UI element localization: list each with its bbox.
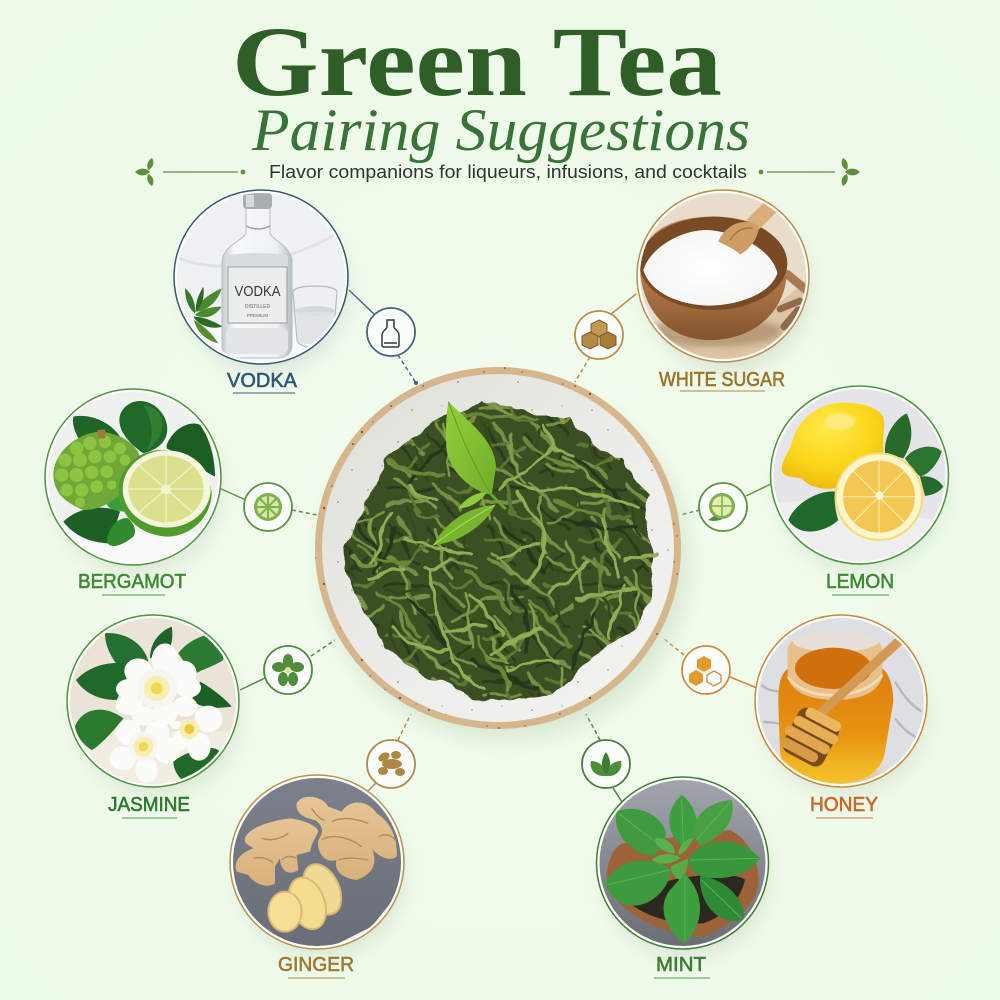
bowl rim bbox=[315, 367, 681, 729]
lemon photo bbox=[774, 389, 946, 561]
bergamot label: BERGAMOT bbox=[78, 571, 186, 593]
honey icon bbox=[682, 646, 730, 694]
sugar icon bbox=[575, 311, 623, 359]
bergamot fruit bbox=[53, 429, 139, 510]
small flower bbox=[170, 706, 222, 761]
lemon leaves bbox=[788, 413, 943, 532]
lemon label: LEMON bbox=[826, 571, 894, 593]
loose tea leaves bbox=[343, 400, 659, 702]
mint label: MINT bbox=[656, 954, 706, 976]
lemon icon bbox=[699, 483, 747, 531]
honey photo bbox=[758, 618, 924, 784]
pairing: vodka bbox=[170, 185, 418, 393]
jasmine label: JASMINE bbox=[108, 794, 190, 816]
lime slice bbox=[119, 450, 212, 537]
mint leaves bbox=[605, 795, 760, 943]
tagline: Flavor companions for liqueurs, infusions, and cocktails bbox=[269, 162, 747, 182]
fresh tea leaf sprig bbox=[433, 402, 505, 545]
pairing: jasmine bbox=[60, 605, 312, 818]
ginger photo bbox=[233, 778, 401, 946]
ginger ring bbox=[230, 775, 404, 949]
ornament left bbox=[135, 158, 245, 186]
bergamot photo bbox=[48, 392, 218, 546]
sugar ring bbox=[637, 190, 809, 362]
ginger icon bbox=[367, 740, 415, 788]
whole lemon bbox=[782, 403, 884, 489]
bottle: PREMIUM bbox=[247, 313, 268, 318]
mint icon bbox=[582, 740, 630, 788]
bowl interior bbox=[322, 374, 674, 722]
pairing: mint bbox=[582, 740, 780, 978]
mint photo bbox=[590, 770, 780, 960]
pairing: ginger bbox=[225, 740, 415, 978]
sugar photo bbox=[640, 193, 806, 359]
bottle: VODKA bbox=[234, 283, 280, 300]
honey ring bbox=[755, 615, 927, 787]
citrus leaves bbox=[63, 401, 215, 546]
jasmine photo bbox=[70, 618, 236, 784]
subtitle script: Pairing Suggestions: Pairing Suggestions bbox=[251, 97, 750, 163]
jasmine leaves bbox=[75, 627, 232, 782]
jasmine ring bbox=[67, 615, 239, 787]
bottle: DISTILLED bbox=[245, 304, 271, 310]
connectors bbox=[219, 290, 771, 808]
vodka icon bbox=[367, 308, 415, 356]
jasmine icon bbox=[264, 646, 312, 694]
mint pot bbox=[607, 830, 759, 937]
honey label: HONEY bbox=[810, 794, 878, 816]
dipper stick bbox=[822, 636, 905, 712]
slate board bbox=[233, 778, 401, 946]
pairing: honey bbox=[682, 605, 935, 818]
vodka ring bbox=[174, 190, 348, 364]
ginger root left bbox=[236, 818, 318, 886]
pairing: bergamot bbox=[40, 385, 292, 595]
center bowl of green tea bbox=[315, 367, 689, 740]
large flower bbox=[115, 643, 201, 726]
ginger root right bbox=[296, 797, 397, 880]
ornament right bbox=[759, 158, 860, 186]
bergamot ring bbox=[45, 389, 221, 565]
leaf sprig bbox=[185, 287, 223, 343]
sugar mound bbox=[643, 230, 777, 306]
white sugar label: WHITE SUGAR bbox=[659, 369, 785, 391]
wooden bowl bbox=[640, 217, 787, 340]
ginger label: GINGER bbox=[278, 954, 354, 976]
pairing: white sugar bbox=[575, 185, 820, 391]
header block bbox=[135, 6, 860, 186]
bottle bbox=[222, 193, 292, 358]
vodka photo bbox=[177, 193, 345, 358]
lower flower bbox=[109, 720, 180, 783]
bergamot icon bbox=[244, 483, 292, 531]
dipper head bbox=[780, 708, 842, 766]
shot glass bbox=[293, 286, 337, 348]
lemon half bbox=[835, 452, 923, 541]
lemon ring bbox=[770, 386, 948, 564]
mint ring bbox=[596, 777, 768, 949]
honey jar bbox=[778, 632, 893, 783]
scoop bbox=[718, 203, 776, 254]
title: Green Tea: Green Tea bbox=[232, 6, 722, 117]
pairing: lemon bbox=[699, 380, 955, 595]
vodka label: VODKA bbox=[227, 370, 298, 392]
ginger slices bbox=[302, 863, 342, 916]
